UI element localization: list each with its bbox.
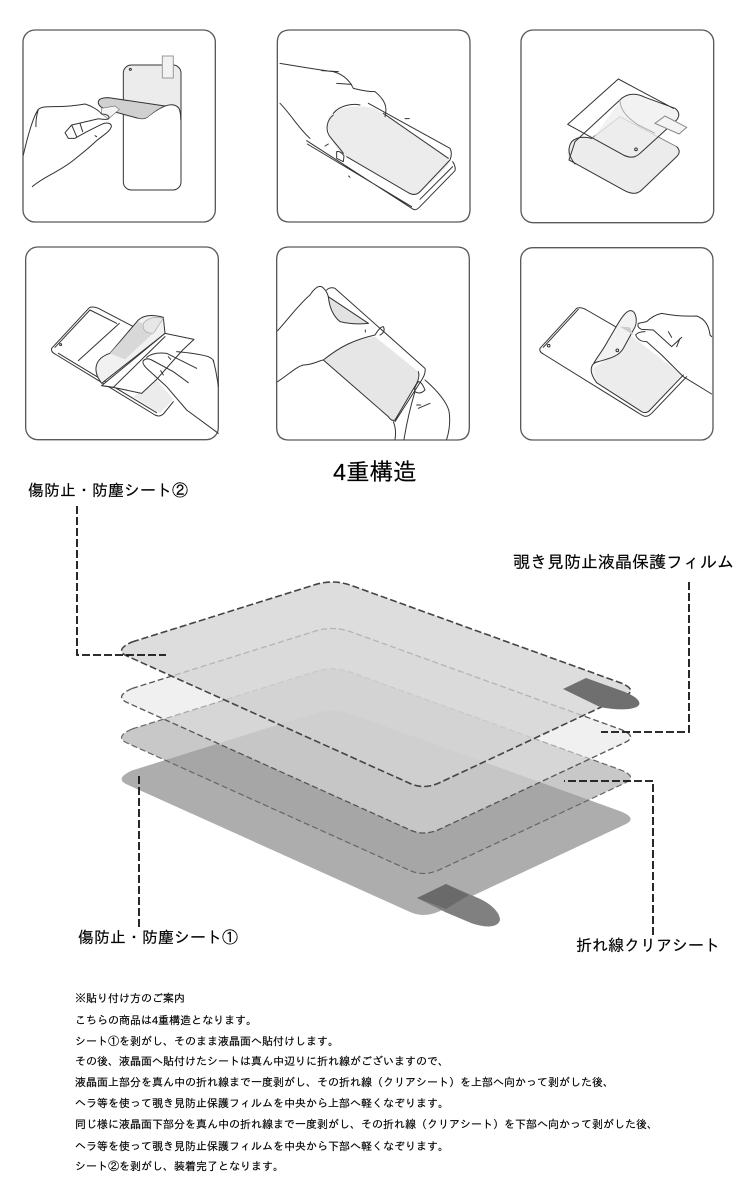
layer 4: bottom protective sheet (122, 710, 631, 915)
title: 4重構造 (333, 459, 417, 485)
hands (278, 286, 450, 439)
hand (143, 352, 218, 433)
bottom sheet (567, 117, 679, 193)
layer 3: clear fold sheet (122, 669, 631, 874)
peeled film strip (96, 316, 165, 383)
text block: application instructions: ヘラ等を使って覗き見防止保護フィルムを中央から上部へ軽くなぞります。 (75, 1098, 449, 1110)
tab: bottom sheet (417, 884, 500, 926)
panel: step 5 fold from both ends (277, 247, 469, 440)
phone outline (51, 307, 173, 416)
label: sheet 2: 傷防止・防塵シート② (28, 483, 188, 500)
label: clear sheet: 折れ線クリアシート (576, 938, 720, 955)
panel: step 6 peel last sheet (521, 248, 713, 440)
phone stack and film (307, 103, 455, 210)
leader: clear sheet (564, 781, 653, 935)
hand (23, 104, 111, 187)
film greyed surfaces (323, 297, 419, 420)
diagram: four layer structure (77, 506, 689, 935)
label: privacy film: 覗き見防止液晶保護フィルム (513, 553, 734, 572)
layer 2: privacy film (122, 628, 631, 833)
text block: application instructions (75, 992, 658, 1173)
text block: application instructions: こちらの商品は4重構造となります。 (75, 1015, 257, 1027)
panel: step 3 film layers (521, 30, 714, 223)
leader: privacy film (601, 582, 689, 732)
hand (636, 313, 712, 394)
top sheet (568, 79, 687, 160)
panel: step 1 apply sheet to phone (23, 30, 215, 222)
panel: step 2 press film with hands (277, 30, 470, 222)
clear band and backing (102, 333, 194, 393)
phone outline with film (123, 56, 181, 190)
text block: application instructions: 同じ様に液晶面下部分を真ん中の折れ線まで一度剥がし、その折れ線（クリアシート）を下部へ向かって剥がした後、 (75, 1119, 658, 1131)
phone edge (323, 288, 425, 422)
text block: application instructions: ヘラ等を使って覗き見防止保護フィルムを中央から下部へ軽くなぞります。 (75, 1141, 449, 1153)
hand (280, 63, 409, 177)
peeled film (98, 98, 181, 153)
leader: sheet 1 (138, 776, 140, 928)
label: sheet 1: 傷防止・防塵シート① (78, 930, 238, 947)
peeled corner (591, 311, 636, 383)
text block: application instructions: その後、液晶面へ貼付けたシートは真ん中辺りに折れ線がございますので、 (75, 1056, 449, 1068)
tab: top sheet (563, 678, 639, 709)
text block: application instructions: 液晶面上部分を真ん中の折れ線まで一度剥がし、その折れ線（クリアシート）を上部へ向かって剥がした後、 (75, 1077, 614, 1089)
phone and film (540, 308, 687, 416)
text block: application instructions: シート②を剥がし、装着完了となります。 (75, 1161, 284, 1173)
leader: sheet 2 (77, 506, 166, 655)
text block: application instructions: ※貼り付け方のご案内 (75, 993, 185, 1005)
layer 1: top protective sheet (122, 582, 631, 786)
panel: step 4 remove clear strip (26, 247, 218, 440)
text block: application instructions: シート①を剥がし、そのまま液晶面へ貼付けします。 (75, 1036, 339, 1048)
